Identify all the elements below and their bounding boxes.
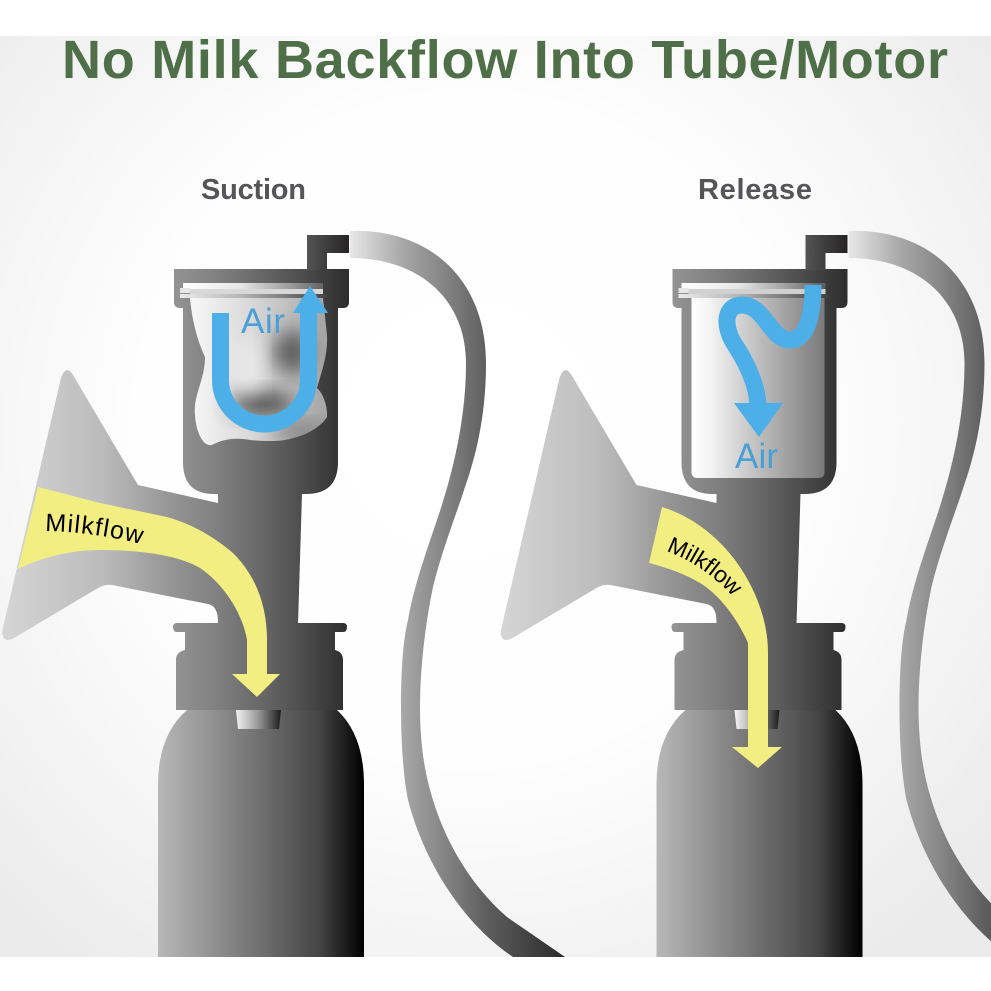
silicone bag [190, 298, 328, 446]
cup rim band [678, 283, 828, 298]
collar [173, 623, 347, 710]
cup rim band [180, 283, 327, 298]
pump structure [500, 231, 991, 957]
valve connector [806, 235, 848, 270]
milkflow label: Milkflow [668, 537, 742, 594]
air label: Air [735, 437, 778, 476]
bottle valve [236, 710, 281, 729]
bottle valve [734, 710, 780, 729]
milkflow label: Milkflow [47, 514, 144, 544]
hose [350, 231, 565, 957]
hose [848, 231, 991, 957]
heading: Release: Release [698, 174, 812, 206]
bottle [158, 710, 364, 957]
air label: Air [241, 302, 285, 341]
bottle [656, 710, 862, 957]
milk flow arrow [18, 487, 280, 697]
milk flow arrow [649, 507, 782, 768]
air arrow [220, 286, 328, 424]
cup interior [692, 298, 824, 478]
heading: Suction: Suction [201, 174, 306, 206]
air arrow [727, 285, 813, 437]
breast shield and cup body [500, 269, 848, 640]
collar [672, 623, 846, 710]
breast shield and cup body [2, 269, 349, 640]
title: No Milk Backflow Into Tube/Motor [62, 30, 948, 90]
valve connector [307, 235, 349, 270]
panel: suction diagram [2, 231, 565, 957]
panel: release diagram [500, 231, 991, 957]
